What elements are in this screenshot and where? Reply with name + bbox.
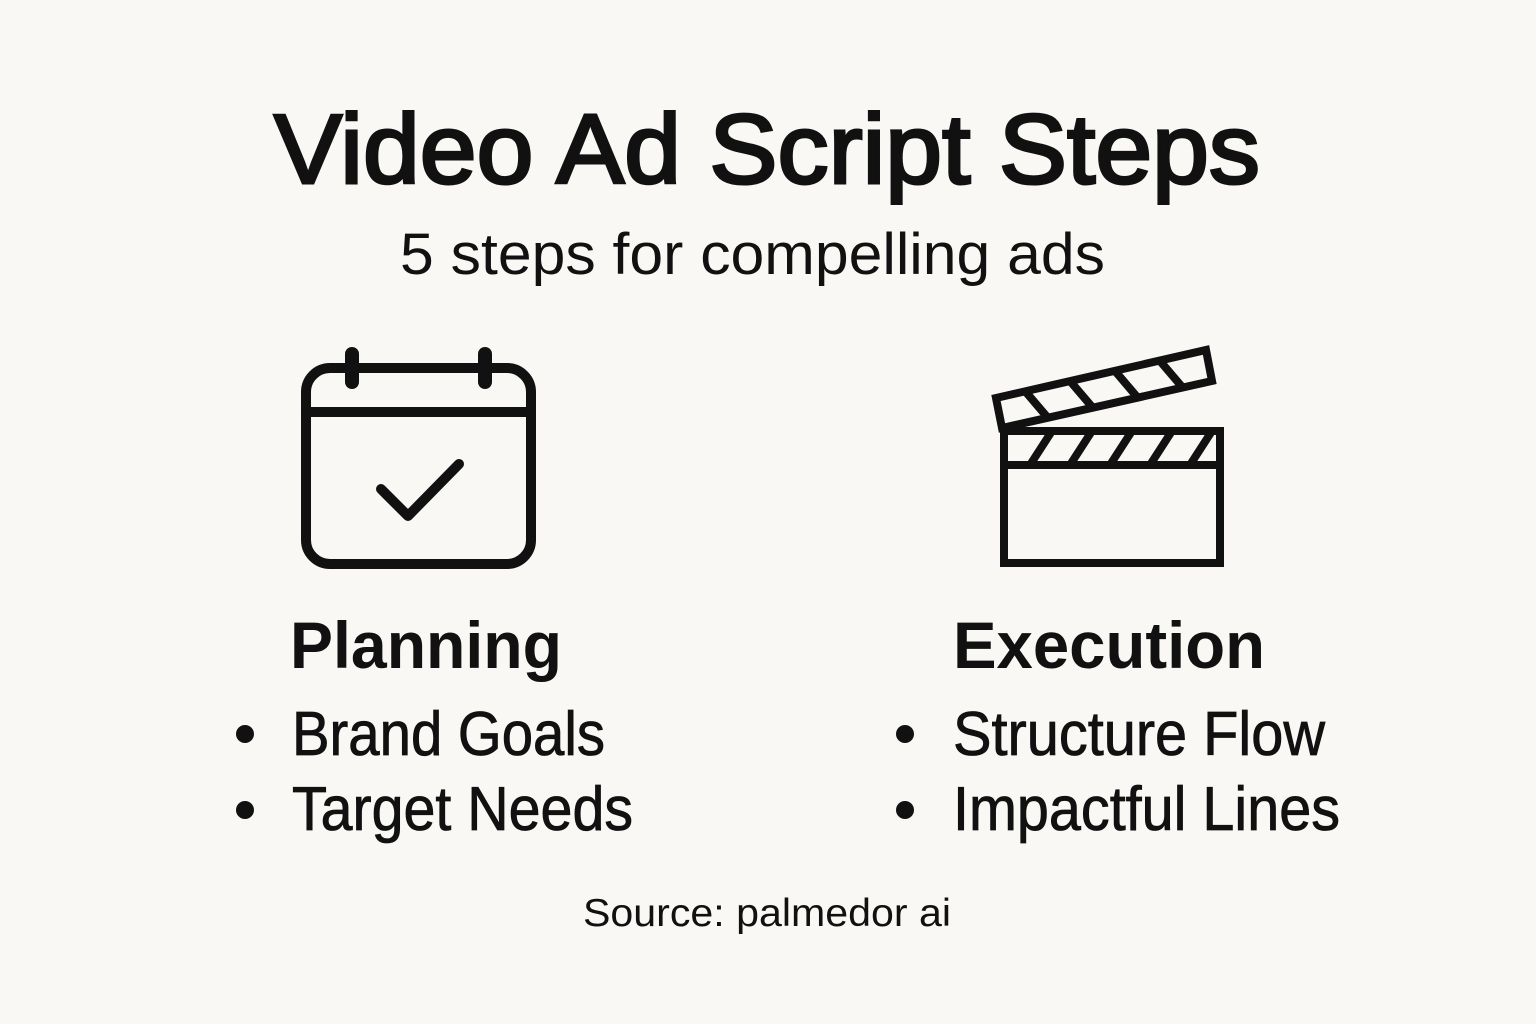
panel: execution: Impactful Lines <box>953 775 1340 844</box>
heading: planning: Planning <box>290 608 562 682</box>
subtitle: 5 steps for compelling ads <box>400 222 1105 287</box>
title: Video Ad Script Steps <box>274 94 1260 204</box>
panel: execution <box>896 608 1340 844</box>
panel: execution: Structure Flow <box>953 700 1325 769</box>
icon: calendar <box>306 354 531 564</box>
panel: planning <box>236 608 633 844</box>
panel: planning: Brand Goals <box>292 700 605 769</box>
source: Source: palmedor ai <box>583 892 951 935</box>
panel: planning: Target Needs <box>292 775 633 844</box>
icon: clapperboard <box>996 350 1220 563</box>
heading: execution: Execution <box>953 608 1265 682</box>
